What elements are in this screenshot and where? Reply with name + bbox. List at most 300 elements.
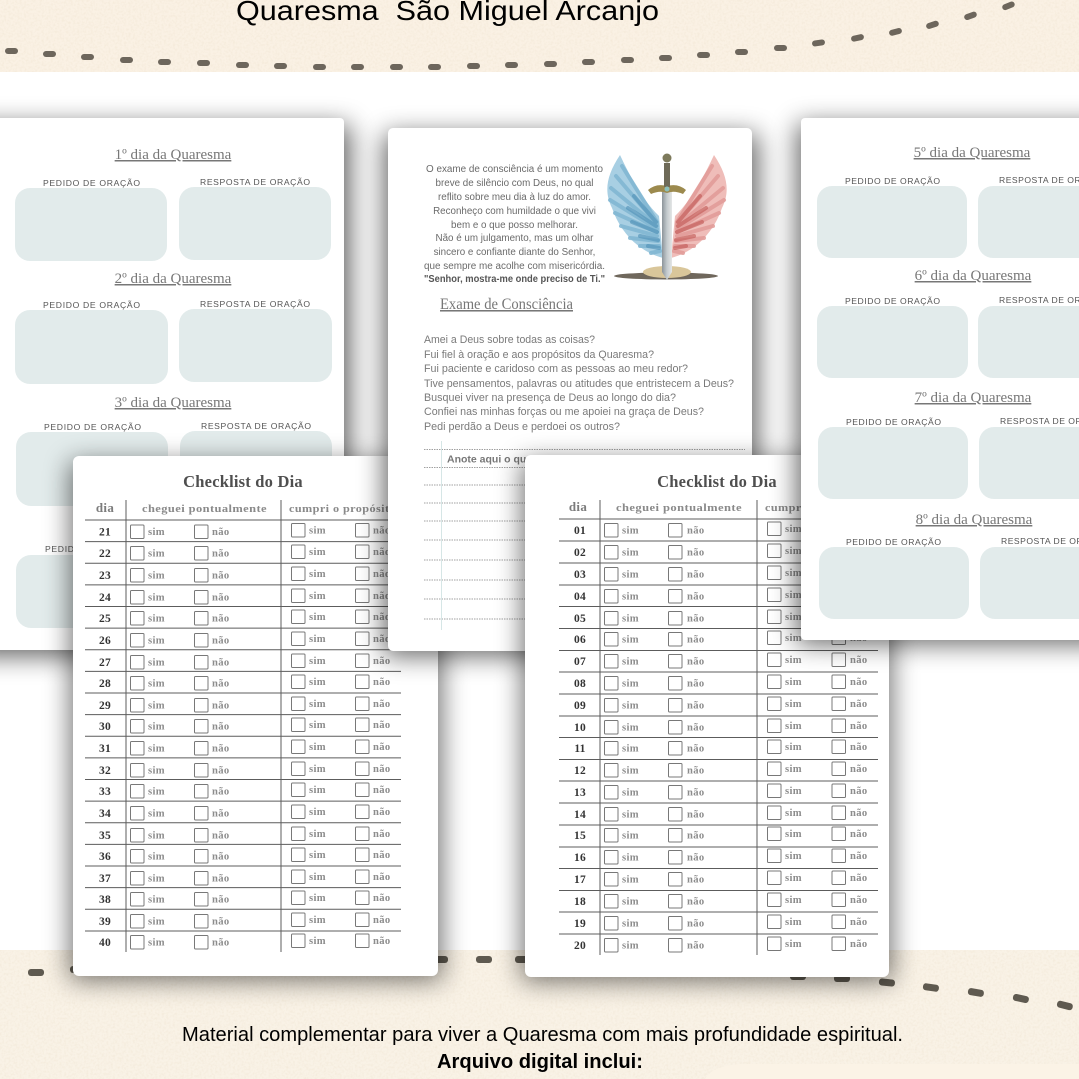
row 02: não bbox=[850, 546, 868, 557]
row 19: sim bbox=[622, 918, 639, 930]
row 08: 08 bbox=[574, 678, 586, 690]
box: day 8 request bbox=[819, 547, 969, 619]
row 08: sim bbox=[785, 677, 802, 688]
row 30: 30 bbox=[99, 721, 111, 733]
row 01 bbox=[574, 522, 868, 537]
box: day 1 request bbox=[15, 188, 167, 261]
label: day 5 request: PEDIDO DE ORAÇÃO bbox=[845, 176, 940, 186]
row 05: não bbox=[687, 614, 705, 624]
row 16: sim bbox=[622, 852, 639, 864]
panel: left prayer page, days 1 to 4 bbox=[0, 118, 350, 656]
row 23: sim bbox=[148, 570, 165, 582]
row 38: sim bbox=[309, 893, 326, 904]
row 07 bbox=[574, 653, 868, 668]
row 15: não bbox=[687, 830, 705, 842]
header: dia: dia bbox=[96, 500, 114, 515]
row 36: sim bbox=[309, 850, 326, 861]
row 27: 27 bbox=[99, 657, 111, 669]
row 21: não bbox=[373, 526, 391, 536]
row 26: sim bbox=[148, 636, 165, 646]
row 22: não bbox=[373, 547, 391, 558]
heading: day 7: 7º dia da Quaresma bbox=[915, 390, 1032, 406]
row 29: 29 bbox=[99, 700, 111, 712]
row 07: não bbox=[687, 656, 705, 668]
row 37: 37 bbox=[99, 873, 111, 885]
row 27: não bbox=[212, 658, 230, 668]
row 28 bbox=[99, 675, 391, 690]
row 27 bbox=[99, 654, 391, 669]
text block: examination questions: Pedi perdão a Deus e perdoei os outros? bbox=[424, 421, 620, 433]
text block: examination questions bbox=[424, 334, 734, 433]
row 20: sim bbox=[622, 940, 639, 952]
text block: examination questions: Confiei nas minhas forças ou me apoiei na graça de Deus? bbox=[424, 406, 704, 418]
row 37: sim bbox=[309, 872, 326, 883]
row 01: 01 bbox=[574, 525, 586, 537]
box: day 3 request bbox=[16, 432, 168, 506]
text block: examination questions: Fui fiel à oração e aos propósitos da Quaresma? bbox=[424, 349, 654, 361]
row 21: não bbox=[212, 527, 230, 538]
row 18 bbox=[574, 893, 868, 908]
row 38: sim bbox=[148, 894, 165, 906]
text block: introduction: "Senhor, mostra-me onde preciso de Ti." bbox=[424, 274, 605, 285]
row 08: não bbox=[850, 677, 868, 688]
row 19: não bbox=[687, 918, 705, 930]
row 21 bbox=[99, 524, 391, 538]
row 21: sim bbox=[148, 527, 165, 538]
row 12 bbox=[574, 762, 868, 777]
text block: introduction: breve de silêncio com Deus, no qual bbox=[436, 178, 593, 189]
icon part: mound bbox=[614, 266, 718, 280]
heading: day 6: 6º dia da Quaresma bbox=[915, 268, 1032, 284]
row 29: não bbox=[373, 699, 391, 710]
row 35: não bbox=[373, 829, 391, 840]
row 24: não bbox=[212, 592, 230, 604]
row 18: não bbox=[850, 895, 868, 906]
heading: examination of conscience: Exame de Consciência bbox=[440, 296, 573, 313]
row 35: não bbox=[212, 830, 230, 842]
footer: includes heading: Arquivo digital inclui: bbox=[437, 1051, 643, 1073]
row 05: sim bbox=[622, 614, 639, 624]
box: day 6 request bbox=[817, 306, 968, 378]
row 12: sim bbox=[785, 764, 802, 775]
row 01: não bbox=[687, 526, 705, 536]
row 04 bbox=[574, 588, 868, 603]
row 31: não bbox=[212, 744, 230, 754]
row 21: 21 bbox=[99, 526, 111, 538]
label: day 8 request: PEDIDO DE ORAÇÃO bbox=[846, 537, 941, 547]
row 27: não bbox=[373, 656, 391, 667]
row 13 bbox=[574, 784, 868, 799]
row 34: não bbox=[212, 808, 230, 820]
box: day 3 answer bbox=[180, 431, 332, 505]
row 05 bbox=[574, 610, 868, 625]
panel: right prayer page, days 5 to 8 bbox=[797, 118, 1079, 644]
row 39 bbox=[99, 913, 391, 928]
row 25: sim bbox=[309, 612, 326, 623]
label: day 2 request: PEDIDO DE ORAÇÃO bbox=[43, 300, 140, 310]
row 24: 24 bbox=[99, 592, 111, 604]
row 23: sim bbox=[309, 569, 326, 580]
row 32: 32 bbox=[99, 765, 111, 777]
label: day 2 answer: RESPOSTA DE ORAÇÃO bbox=[200, 299, 310, 309]
row 28: não bbox=[373, 677, 391, 688]
row 17: não bbox=[687, 874, 705, 886]
row 02: 02 bbox=[574, 547, 586, 559]
row 34: não bbox=[373, 807, 391, 818]
row 11: não bbox=[687, 744, 705, 754]
row 33 bbox=[99, 783, 391, 798]
row 17 bbox=[574, 871, 868, 886]
row 16: sim bbox=[785, 851, 802, 862]
row 16: não bbox=[850, 851, 868, 862]
row 13: não bbox=[687, 788, 705, 798]
row 37: não bbox=[212, 874, 230, 884]
row 32: sim bbox=[148, 766, 165, 776]
row 07: não bbox=[850, 655, 868, 666]
row 06: 06 bbox=[574, 634, 586, 646]
row 34: sim bbox=[148, 808, 165, 820]
label: day 1 answer: RESPOSTA DE ORAÇÃO bbox=[200, 177, 310, 187]
row 02 bbox=[574, 544, 868, 559]
row 13: 13 bbox=[574, 787, 586, 799]
text block: introduction: reflito sobre meu dia à luz do amor. bbox=[438, 192, 591, 203]
row 09: sim bbox=[785, 699, 802, 710]
row 31: sim bbox=[148, 744, 165, 754]
row 38: não bbox=[212, 894, 230, 906]
box: day 4 request bbox=[16, 555, 168, 628]
header: fulfilled the purpose: cumpri o propósito bbox=[765, 503, 872, 514]
row 05: não bbox=[850, 612, 868, 623]
row 18: 18 bbox=[574, 896, 586, 908]
row 11: 11 bbox=[574, 743, 586, 755]
row 11: sim bbox=[785, 742, 802, 753]
row 08: não bbox=[687, 678, 705, 690]
row 03: 03 bbox=[574, 569, 586, 581]
row 28: 28 bbox=[99, 678, 111, 690]
row 09: não bbox=[687, 700, 705, 712]
background: top paper band bbox=[0, 0, 1079, 72]
row 15: sim bbox=[622, 830, 639, 842]
page contents: days 1 to 4 bbox=[15, 147, 332, 628]
row 23: não bbox=[373, 569, 391, 580]
row 15: 15 bbox=[574, 830, 586, 842]
text block: introduction: sincero e confiante diante do Senhor, bbox=[434, 247, 595, 258]
row 14: não bbox=[687, 810, 705, 820]
row 26: sim bbox=[309, 634, 326, 645]
heading: checklist: Checklist do Dia bbox=[657, 472, 777, 491]
row 33: não bbox=[212, 786, 230, 798]
row 14: sim bbox=[785, 808, 802, 819]
row 03: sim bbox=[785, 568, 802, 579]
row 10: sim bbox=[785, 721, 802, 732]
row 05: sim bbox=[785, 612, 802, 623]
row 10: 10 bbox=[574, 722, 586, 734]
heading: checklist: Checklist do Dia bbox=[183, 472, 303, 491]
row 10: não bbox=[850, 721, 868, 732]
row 12: não bbox=[850, 764, 868, 775]
row 19: 19 bbox=[574, 918, 586, 930]
row 04: não bbox=[687, 592, 705, 602]
row 12: sim bbox=[622, 766, 639, 776]
row 26: não bbox=[373, 634, 391, 645]
row 23: não bbox=[212, 570, 230, 582]
page contents: examination of conscience bbox=[424, 154, 745, 630]
row 15: não bbox=[850, 829, 868, 840]
row 05: 05 bbox=[574, 613, 586, 625]
text block: introduction: Não é um julgamento, mas um olhar bbox=[436, 233, 594, 244]
row 24: não bbox=[373, 591, 391, 602]
footer: description: Material complementar para viver a Quaresma com mais profundidade espiritual. bbox=[182, 1024, 903, 1046]
row 32: sim bbox=[309, 764, 326, 775]
row 18: não bbox=[687, 896, 705, 908]
row 39: não bbox=[212, 916, 230, 928]
text block: introduction: O exame de consciência é um momento bbox=[426, 164, 604, 175]
row 36: não bbox=[212, 852, 230, 862]
row 40: sim bbox=[309, 936, 326, 947]
row 30 bbox=[99, 718, 391, 733]
row 31 bbox=[99, 740, 391, 755]
row 01: sim bbox=[622, 526, 639, 536]
row 29 bbox=[99, 697, 391, 712]
row 25 bbox=[99, 610, 391, 625]
row 23: 23 bbox=[99, 570, 111, 582]
row 38: não bbox=[373, 893, 391, 904]
row 36 bbox=[99, 848, 391, 863]
row 22: 22 bbox=[99, 548, 111, 560]
row 35 bbox=[99, 827, 391, 842]
page contents: checklist table 21 to 40 bbox=[85, 472, 401, 952]
row 27: sim bbox=[309, 656, 326, 667]
box: day 5 request bbox=[817, 186, 967, 258]
table rules bbox=[559, 500, 878, 955]
text block: introduction: bem e o que posso melhorar. bbox=[451, 220, 578, 231]
row 34: sim bbox=[309, 807, 326, 818]
row 02: sim bbox=[622, 548, 639, 558]
row 15 bbox=[574, 827, 868, 842]
header: dia: dia bbox=[569, 499, 587, 514]
row 38 bbox=[99, 891, 391, 906]
row 23 bbox=[99, 567, 391, 582]
row 06: não bbox=[850, 633, 868, 644]
row 16: não bbox=[687, 852, 705, 864]
row 30: sim bbox=[148, 722, 165, 732]
row 01: não bbox=[850, 524, 868, 535]
row 34 bbox=[99, 805, 391, 820]
row 22 bbox=[99, 545, 391, 560]
row 40: sim bbox=[148, 938, 165, 948]
row 35: sim bbox=[309, 829, 326, 840]
row 33: 33 bbox=[99, 786, 111, 798]
notes prompt: Anote aqui o que bbox=[447, 454, 532, 466]
row 06: sim bbox=[785, 633, 802, 644]
heading: day 3: 3º dia da Quaresma bbox=[115, 395, 232, 411]
row 12: 12 bbox=[574, 765, 586, 777]
row 17: não bbox=[850, 873, 868, 884]
label: day 4 request: PEDIDO DE ORAÇÃO bbox=[45, 544, 142, 554]
row 30: não bbox=[212, 722, 230, 732]
row 02: sim bbox=[785, 546, 802, 557]
label: day 7 request: PEDIDO DE ORAÇÃO bbox=[846, 417, 941, 427]
row 35: 35 bbox=[99, 830, 111, 842]
row 12: não bbox=[687, 766, 705, 776]
row 36: sim bbox=[148, 852, 165, 862]
row 20: não bbox=[687, 940, 705, 952]
box: day 2 request bbox=[15, 310, 168, 384]
row 09 bbox=[574, 697, 868, 712]
box: day 7 answer bbox=[979, 427, 1079, 499]
row 04: sim bbox=[622, 592, 639, 602]
row 22: não bbox=[212, 548, 230, 560]
row 39: não bbox=[373, 915, 391, 926]
row 04: sim bbox=[785, 590, 802, 601]
text block: introduction bbox=[424, 164, 605, 285]
text block: introduction: que sempre me acolhe com misericórdia. bbox=[424, 261, 605, 272]
row 13: sim bbox=[622, 788, 639, 798]
text block: examination questions: Amei a Deus sobre todas as coisas? bbox=[424, 334, 595, 346]
row 36: não bbox=[373, 850, 391, 861]
row 24: sim bbox=[309, 591, 326, 602]
box: day 1 answer bbox=[179, 187, 331, 260]
row 33: sim bbox=[148, 786, 165, 798]
row 11: não bbox=[850, 742, 868, 753]
row 06: não bbox=[687, 634, 705, 646]
row 31: 31 bbox=[99, 743, 111, 755]
header: arrived on time: cheguei pontualmente bbox=[142, 504, 267, 515]
row 06: sim bbox=[622, 634, 639, 646]
row 37 bbox=[99, 870, 391, 885]
row 09: 09 bbox=[574, 700, 586, 712]
row 29: sim bbox=[148, 700, 165, 712]
box: day 8 answer bbox=[980, 547, 1079, 619]
row 09: sim bbox=[622, 700, 639, 712]
row 28: sim bbox=[309, 677, 326, 688]
row 09: não bbox=[850, 699, 868, 710]
row 17: 17 bbox=[574, 874, 586, 886]
label: day 3 answer: RESPOSTA DE ORAÇÃO bbox=[201, 421, 311, 431]
row 01: sim bbox=[785, 524, 802, 535]
box: day 7 request bbox=[818, 427, 968, 499]
row 19: sim bbox=[785, 917, 802, 928]
row 17: sim bbox=[785, 873, 802, 884]
row 10: sim bbox=[622, 722, 639, 734]
row 20 bbox=[574, 937, 868, 952]
row 06 bbox=[574, 631, 868, 646]
row 25: não bbox=[212, 614, 230, 624]
box: day 2 answer bbox=[179, 309, 332, 382]
text block: examination questions: Busquei viver na presença de Deus ao longo do dia? bbox=[424, 392, 676, 404]
row 14 bbox=[574, 806, 868, 821]
row 38: 38 bbox=[99, 894, 111, 906]
table rules bbox=[85, 500, 401, 952]
box: day 5 answer bbox=[978, 186, 1079, 258]
bottom dotted curve bbox=[28, 956, 1073, 1011]
row 07: 07 bbox=[574, 656, 586, 668]
row 25: sim bbox=[148, 614, 165, 624]
row 20: sim bbox=[785, 939, 802, 950]
background: bottom paper band bbox=[0, 950, 1079, 1079]
row 24: sim bbox=[148, 592, 165, 604]
row 03: sim bbox=[622, 570, 639, 580]
row 19: não bbox=[850, 917, 868, 928]
label: day 3 request: PEDIDO DE ORAÇÃO bbox=[44, 422, 141, 432]
row 36: 36 bbox=[99, 851, 111, 863]
row 25: 25 bbox=[99, 613, 111, 625]
row 13: sim bbox=[785, 786, 802, 797]
heading: day 1: 1º dia da Quaresma bbox=[115, 147, 232, 163]
icon part: blue wing bbox=[607, 155, 663, 258]
panel: checklist days 21 to 40 bbox=[70, 456, 442, 980]
row 29: não bbox=[212, 700, 230, 712]
row 35: sim bbox=[148, 830, 165, 842]
row 20: não bbox=[850, 939, 868, 950]
row 18: sim bbox=[785, 895, 802, 906]
row 16: 16 bbox=[574, 852, 586, 864]
row 13: não bbox=[850, 786, 868, 797]
row 26: não bbox=[212, 636, 230, 646]
row 11 bbox=[574, 740, 868, 755]
row 26 bbox=[99, 632, 391, 647]
row 20: 20 bbox=[574, 940, 586, 952]
row 14: sim bbox=[622, 810, 639, 820]
row 10: não bbox=[687, 722, 705, 734]
heading: day 2: 2º dia da Quaresma bbox=[115, 271, 232, 287]
notes lines bbox=[424, 450, 745, 619]
row 32 bbox=[99, 762, 391, 777]
row 03: não bbox=[850, 568, 868, 579]
row 27: sim bbox=[148, 658, 165, 668]
row 11: sim bbox=[622, 744, 639, 754]
row 39: sim bbox=[148, 916, 165, 928]
row 10 bbox=[574, 719, 868, 734]
row 31: não bbox=[373, 742, 391, 753]
row 40 bbox=[99, 934, 391, 949]
row 39: sim bbox=[309, 915, 326, 926]
row 40: não bbox=[212, 938, 230, 948]
row 15: sim bbox=[785, 829, 802, 840]
icon part: sword bbox=[648, 154, 686, 280]
box: day 6 answer bbox=[978, 306, 1079, 378]
row 30: não bbox=[373, 720, 391, 731]
row 39: 39 bbox=[99, 916, 111, 928]
row 16 bbox=[574, 849, 868, 864]
row 33: sim bbox=[309, 785, 326, 796]
header: fulfilled the purpose: cumpri o propósito bbox=[289, 504, 396, 515]
row 22: sim bbox=[309, 547, 326, 558]
row 07: sim bbox=[785, 655, 802, 666]
row 32: não bbox=[212, 766, 230, 776]
row 40: 40 bbox=[99, 937, 111, 949]
row 29: sim bbox=[309, 699, 326, 710]
notes margin line bbox=[440, 441, 442, 630]
row 31: sim bbox=[309, 742, 326, 753]
row 28: não bbox=[212, 678, 230, 690]
row 14: 14 bbox=[574, 809, 586, 821]
row 25: não bbox=[373, 612, 391, 623]
row 14: não bbox=[850, 808, 868, 819]
row 08 bbox=[574, 675, 868, 690]
row 24 bbox=[99, 589, 391, 604]
row 18: sim bbox=[622, 896, 639, 908]
row 04: 04 bbox=[574, 591, 586, 603]
page contents: days 5 to 8 bbox=[817, 145, 1079, 619]
row 40: não bbox=[373, 936, 391, 947]
text block: examination questions: Fui paciente e caridoso com as pessoas ao meu redor? bbox=[424, 363, 688, 375]
row 08: sim bbox=[622, 678, 639, 690]
row 28: sim bbox=[148, 678, 165, 690]
row 33: não bbox=[373, 785, 391, 796]
row 21: sim bbox=[309, 526, 326, 536]
row 03: não bbox=[687, 570, 705, 580]
